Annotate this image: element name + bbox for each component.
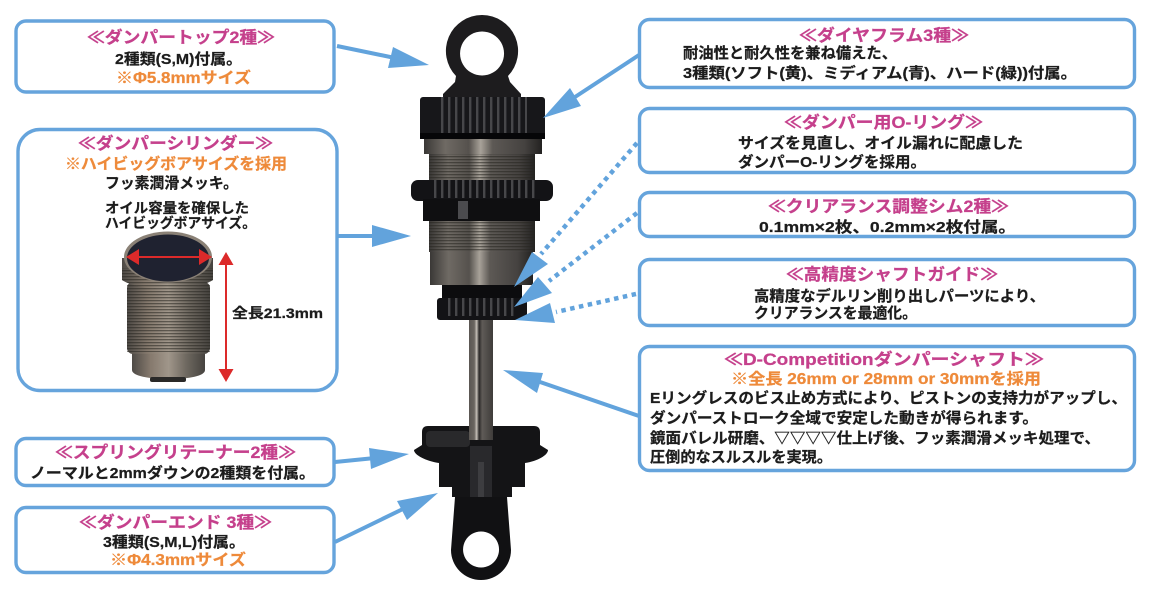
arrow: spring retainer	[335, 448, 409, 469]
panel: spring retainer	[16, 438, 334, 486]
arrow: clearance shim	[514, 213, 637, 307]
arrow: shaft guide	[515, 294, 636, 323]
panel: D-Competition shaft: 圧倒的なスルスルを実現。	[650, 448, 832, 466]
top cap	[420, 97, 545, 137]
note: ※Φ5.8mmサイズ	[116, 68, 252, 87]
panel: diaphragm: 3種類(ソフト(黄)、ミディアム(青)、ハード(緑))付属。	[683, 64, 1077, 82]
heading: ≪ダイヤフラム3種≫	[799, 25, 969, 45]
heading: ≪高精度シャフトガイド≫	[786, 264, 998, 284]
panel: D-Competition shaft: ダンパーストローク全域で安定した動きが得られます。	[650, 409, 1038, 427]
heading: ≪ダンパーエンド 3種≫	[79, 512, 272, 532]
heading: ≪ダンパーシリンダー≫	[78, 133, 273, 153]
top eye	[443, 15, 521, 98]
description: 2種類(S,M)付属。	[115, 51, 242, 68]
upper collar and thread	[424, 139, 542, 154]
panel: clearance shim	[640, 192, 1134, 236]
panel: damper cylinder: ハイビッグボアサイズ。	[105, 215, 256, 231]
description: 3種類(S,M,L)付属。	[103, 534, 245, 551]
smooth body	[430, 252, 533, 285]
panel: damper top	[16, 21, 334, 92]
description: ノーマルと2mmダウンの2種類を付属。	[30, 464, 315, 482]
description: フッ素潤滑メッキ。	[105, 175, 238, 192]
arrow: D-Competition shaft	[503, 370, 639, 416]
piston shaft	[469, 320, 493, 440]
lower thread	[429, 221, 535, 252]
panel: damper end	[16, 508, 334, 572]
note: ※ハイビッグボアサイズを採用	[65, 154, 287, 173]
lower cap	[442, 285, 522, 299]
shock absorber photo	[411, 15, 553, 580]
caption: オイル容量を確保した	[105, 200, 249, 216]
panel: O-ring	[640, 108, 1134, 172]
heading: ≪ダンパー用O-リング≫	[784, 112, 983, 132]
adjuster nut	[411, 180, 553, 201]
heading: ≪D-Competitionダンパーシャフト≫	[724, 349, 1044, 369]
arrow: damper end	[335, 493, 438, 542]
note: ※全長 26mm or 28mm or 30mmを採用	[731, 369, 1041, 388]
description: 0.1mm×2枚、0.2mm×2枚付属。	[759, 218, 1016, 236]
panel: damper cylinder	[18, 130, 337, 390]
arrow: O-ring	[514, 143, 637, 287]
panel: diaphragm	[640, 20, 1134, 88]
heading: ≪ダンパートップ2種≫	[87, 27, 275, 47]
description: 耐油性と耐久性を兼ね備えた、	[683, 44, 897, 62]
panel: shaft guide	[640, 260, 1134, 326]
heading: ≪クリアランス調整シム2種≫	[768, 197, 1009, 216]
bore arrow	[126, 249, 212, 265]
arrow: cylinder	[337, 225, 411, 247]
arrow: damper top	[337, 46, 429, 68]
length label: 全長21.3mm	[232, 305, 323, 321]
spring retainer	[414, 426, 548, 497]
description: サイズを見直し、オイル漏れに配慮した	[738, 134, 1023, 152]
arrow: diaphragm	[543, 55, 639, 118]
panel: shaft guide: クリアランスを最適化。	[754, 304, 917, 322]
description: Eリングレスのビス止め方式により、ピストンの支持力がアップし、	[650, 389, 1127, 407]
length arrow	[218, 252, 234, 382]
heading: ≪スプリングリテーナー2種≫	[55, 442, 296, 462]
description: 高精度なデルリン削り出しパーツにより、	[754, 287, 1045, 305]
note: ※Φ4.3mmサイズ	[110, 550, 247, 569]
panel: D-Competition shaft	[640, 346, 1134, 470]
panel: O-ring: ダンパーO-リングを採用。	[738, 153, 926, 171]
panel: D-Competition shaft: 鏡面バレル研磨、▽▽▽▽仕上げ後、フッ素潤滑メッキ処理で、	[650, 429, 1100, 447]
cylinder photo	[122, 232, 213, 382]
spring end	[451, 497, 511, 580]
